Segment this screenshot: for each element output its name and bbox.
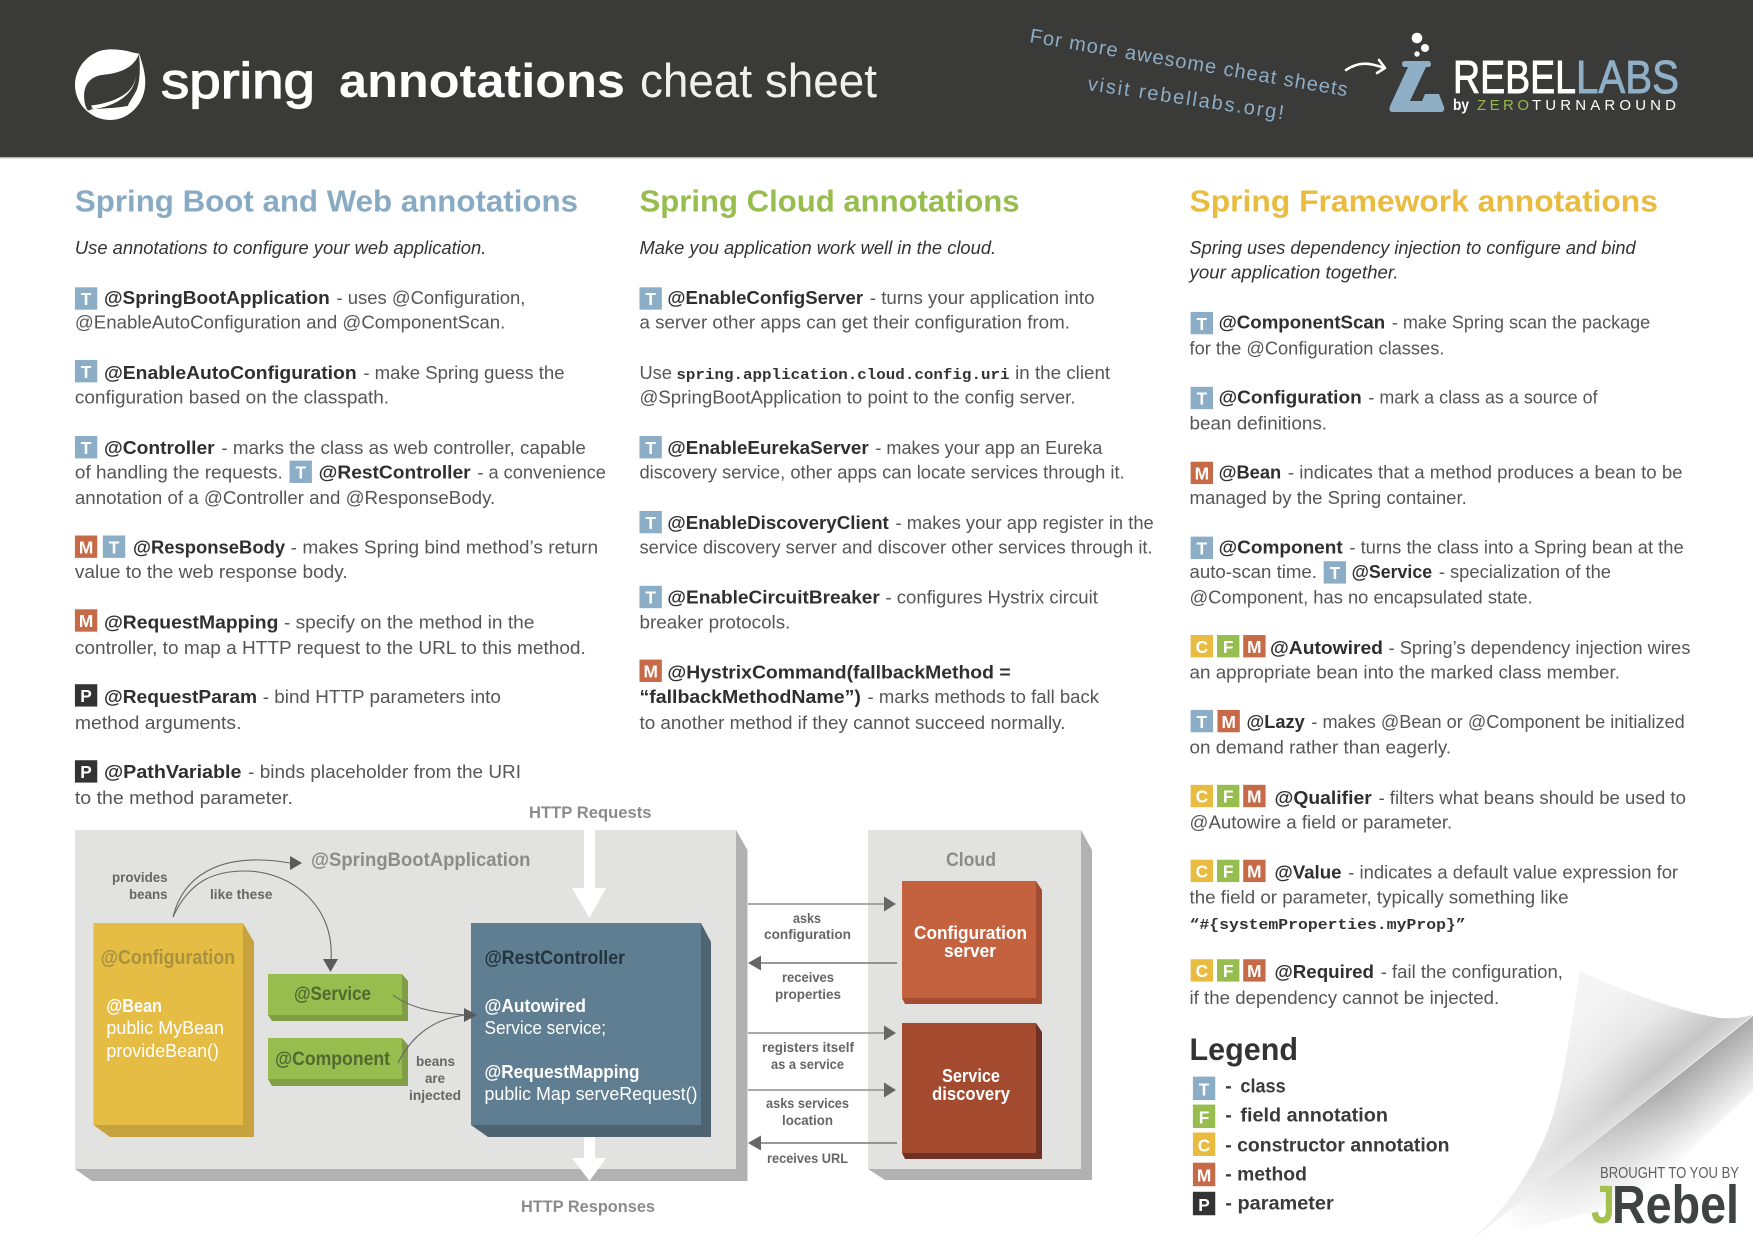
logo: jrebel: [1591, 1165, 1739, 1235]
entry: Controller and RestController: of handling the requests.: [75, 461, 283, 482]
panel: application box: [75, 830, 748, 1181]
icon: arrow to logo: [1346, 60, 1385, 73]
entry: Controller and RestController: @Controller: [104, 437, 215, 458]
intro: boot: Use annotations to configure your web application.: [75, 237, 486, 258]
panel: cloud box: [868, 830, 1092, 1180]
entry: RequestParam: [75, 684, 501, 733]
entry: Value: F: [1223, 862, 1234, 882]
entry: Component and Service: @Component, has no encapsulated state.: [1190, 587, 1533, 608]
heading: spring boot and web: Spring Boot and Web annotations: [75, 185, 578, 218]
entry: EnableConfigServer: @EnableConfigServer: [667, 287, 863, 308]
legend: method: [1193, 1163, 1307, 1186]
logo: rebellabs wordmark: LABS: [1576, 51, 1679, 103]
header band: [0, 0, 1753, 158]
entry: EnableCircuitBreaker: - configures Hystrix circuit: [885, 587, 1099, 608]
entry: RequestMapping: - specify on the method in the: [284, 611, 534, 632]
entry: Required: [1190, 959, 1563, 1008]
label: http responses: HTTP Responses: [521, 1197, 655, 1216]
entry: Autowired: M: [1247, 637, 1262, 657]
arrow: beans injected: [393, 995, 477, 1063]
entry: Configuration: T: [1197, 389, 1208, 409]
entry: ComponentScan: [1190, 312, 1650, 358]
entry: Component and Service: T: [1197, 539, 1208, 559]
entry: HystrixCommand: [639, 660, 1100, 733]
page curl: [1475, 971, 1753, 1240]
entry: PathVariable: [75, 760, 521, 808]
entry: Required: if the dependency cannot be injected.: [1190, 987, 1499, 1008]
entry: RequestMapping: M: [79, 611, 93, 631]
block: configuration server: [902, 881, 1042, 1004]
entry: EnableEurekaServer: T: [645, 438, 656, 458]
legend heading: Legend: [1190, 1032, 1298, 1067]
entry: Controller and RestController: @RestController: [319, 461, 471, 482]
entry: SpringBootApplication: @SpringBootApplication: [104, 287, 330, 308]
entry: Lazy: on demand rather than eagerly.: [1190, 737, 1451, 758]
text block: config uri note: [639, 362, 1111, 408]
entry: Qualifier: F: [1223, 787, 1234, 807]
entry: Required: M: [1247, 961, 1262, 981]
legend: method: M: [1197, 1166, 1211, 1186]
block: restcontroller: public Map serveRequest(): [484, 1084, 698, 1104]
entry: Qualifier: [1190, 785, 1686, 832]
entry: RequestParam: P: [80, 686, 92, 706]
entry: PathVariable: @PathVariable: [104, 761, 241, 782]
handwritten note: For more awesome cheat sheets: [1028, 25, 1349, 101]
entry: Component and Service: T: [1330, 563, 1341, 583]
handwritten note: visit rebellabs.org!: [1086, 73, 1285, 124]
entry: Bean: @Bean: [1219, 461, 1281, 482]
entry: Bean: [1190, 461, 1683, 508]
panel: spring framework annotations: [1188, 185, 1690, 1008]
arrow: like these: [173, 871, 338, 972]
entry: EnableEurekaServer: discovery service, other apps can locate services through it.: [639, 461, 1125, 482]
entry: Bean: - indicates that a method produces a bean to be: [1288, 461, 1683, 482]
entry: EnableConfigServer: [639, 287, 1095, 333]
entry: ResponseBody: - makes Spring bind method’s return: [291, 536, 598, 557]
entry: EnableAutoConfiguration: [75, 360, 565, 408]
entry: ResponseBody: [75, 536, 598, 582]
entry: RequestMapping: [75, 609, 586, 658]
intro: framework: Spring uses dependency injection to configure and bind: [1190, 237, 1636, 258]
arrow: asks services location: [748, 1082, 896, 1098]
block: configuration server: server: [944, 941, 996, 961]
entry: Autowired: F: [1223, 637, 1234, 657]
logo: rebellabs wordmark: by: [1453, 97, 1469, 114]
label: registers itself: [762, 1039, 854, 1072]
label: asks services location: asks services: [766, 1095, 849, 1111]
legend: field annotation: [1193, 1104, 1388, 1128]
entry: Bean: M: [1195, 464, 1209, 484]
label: like these: like these: [210, 886, 273, 902]
label: http requests: HTTP Requests: [529, 803, 652, 822]
entry: EnableEurekaServer: - makes your app an Eureka: [875, 437, 1103, 458]
entry: Controller and RestController: - marks the class as web controller, capable: [221, 437, 586, 458]
label: receives url: receives URL: [767, 1150, 848, 1166]
label: beans are injected: beans: [416, 1053, 455, 1069]
block: restcontroller: @RestController: [484, 948, 626, 969]
legend: class: [1193, 1075, 1286, 1100]
text block: config uri note: @SpringBootApplication to point to the config server.: [639, 387, 1075, 408]
entry: Qualifier: @Autowire a field or parameter.: [1190, 811, 1452, 832]
entry: Controller and RestController: annotation of a @Controller and @ResponseBody.: [75, 487, 495, 508]
logo: rebellabs wordmark: TURNAROUND: [1532, 97, 1676, 114]
entry: Required: - fail the configuration,: [1381, 961, 1563, 982]
entry: EnableCircuitBreaker: [639, 586, 1099, 632]
entry: Configuration: bean definitions.: [1190, 412, 1327, 433]
arrow: http response: [572, 1137, 606, 1181]
entry: Configuration: [1190, 387, 1598, 433]
entry: Controller and RestController: [75, 436, 606, 508]
entry: ResponseBody: @ResponseBody: [133, 536, 286, 557]
icon: rebellabs flask: [1389, 33, 1444, 112]
arrow: provides beans: [173, 856, 302, 917]
block: restcontroller: @RequestMapping: [484, 1062, 640, 1082]
entry: RequestMapping: @RequestMapping: [104, 611, 278, 632]
entry: Component and Service: auto-scan time.: [1190, 561, 1317, 582]
entry: ComponentScan: @ComponentScan: [1219, 312, 1385, 333]
block: configuration: @Configuration: [101, 947, 235, 969]
label: provides beans: [112, 869, 168, 902]
logo: rebellabs wordmark: REBEL: [1453, 51, 1576, 103]
entry: Component and Service: @Component: [1219, 536, 1343, 557]
panel: spring boot and web annotations: [75, 185, 606, 808]
logo: rebellabs wordmark: [1453, 51, 1679, 114]
intro: framework: your application together.: [1188, 261, 1399, 282]
block: configuration: provideBean(): [106, 1041, 219, 1061]
block: configuration: public MyBean: [106, 1018, 224, 1038]
entry: RequestParam: method arguments.: [75, 712, 241, 733]
arrow: registers itself: [748, 1026, 896, 1040]
entry: SpringBootApplication: @EnableAutoConfiguration and @ComponentScan.: [75, 312, 505, 333]
label: receives properties: receives: [782, 969, 834, 985]
legend: field annotation: field annotation: [1240, 1104, 1388, 1126]
entry: Component and Service: - turns the class into a Spring bean at the: [1349, 536, 1684, 557]
entry: EnableAutoConfiguration: T: [81, 362, 92, 382]
label: provides beans: beans: [129, 886, 168, 902]
entry: Controller and RestController: T: [295, 462, 306, 482]
entry: Required: @Required: [1274, 961, 1374, 982]
entry: EnableEurekaServer: @EnableEurekaServer: [667, 437, 869, 458]
entry: HystrixCommand: to another method if they cannot succeed normally.: [639, 712, 1065, 733]
label: beans are injected: are: [425, 1070, 445, 1086]
entry: Controller and RestController: T: [81, 438, 92, 458]
heading: spring framework: Spring Framework annotations: [1190, 185, 1658, 218]
entry: HystrixCommand: @HystrixCommand(fallbackMethod =: [667, 662, 1011, 683]
text block: config uri note: spring.application.cloud.config.uri: [676, 366, 1010, 384]
entry: Component and Service: @Service: [1352, 561, 1432, 582]
entry: Lazy: T: [1197, 712, 1208, 732]
legend: class: T: [1199, 1080, 1210, 1100]
title: spring: [161, 53, 315, 109]
entry: ComponentScan: for the @Configuration classes.: [1190, 337, 1444, 358]
block: service: [268, 974, 408, 1021]
entry: Value: @Value: [1274, 862, 1342, 883]
label: asks configuration: asks: [793, 910, 821, 926]
arrow: receives url: [748, 1136, 897, 1150]
block: component: @Component: [275, 1049, 391, 1070]
block: service: @Service: [294, 984, 371, 1005]
entry: Required: F: [1223, 961, 1234, 981]
label: receives properties: properties: [775, 986, 841, 1002]
arrow: receives properties: [748, 956, 897, 970]
logo: jrebel: J: [1591, 1175, 1615, 1235]
entry: Autowired: [1190, 635, 1690, 683]
legend: method: - method: [1225, 1164, 1307, 1186]
heading: spring cloud: Spring Cloud annotations: [639, 185, 1020, 218]
entry: ComponentScan: T: [1197, 314, 1208, 334]
label: asks configuration: configuration: [764, 926, 851, 942]
legend: class: class: [1240, 1075, 1286, 1097]
entry: Autowired: C: [1196, 637, 1209, 657]
text block: config uri note: Use: [639, 362, 672, 383]
panel: cloud box: Cloud: [946, 850, 996, 871]
entry: EnableCircuitBreaker: breaker protocols.: [639, 611, 790, 632]
entry: Required: C: [1196, 961, 1209, 981]
entry: EnableCircuitBreaker: @EnableCircuitBreaker: [667, 587, 880, 608]
entry: Qualifier: - filters what beans should be used to: [1378, 787, 1686, 808]
entry: Qualifier: C: [1196, 787, 1209, 807]
legend: field annotation: -: [1225, 1104, 1232, 1126]
icon: spring leaf logo: [75, 49, 145, 120]
intro: framework: [1188, 237, 1636, 282]
entry: Component and Service: - specialization of the: [1439, 561, 1611, 582]
entry: PathVariable: - binds placeholder from the URI: [248, 761, 521, 782]
legend: field annotation: F: [1199, 1108, 1209, 1128]
entry: Lazy: [1190, 710, 1685, 758]
entry: Configuration: - mark a class as a source of: [1368, 387, 1598, 408]
entry: Value: [1190, 860, 1678, 934]
label: asks configuration: [764, 910, 851, 942]
entry: PathVariable: to the method parameter.: [75, 787, 293, 808]
entry: EnableAutoConfiguration: @EnableAutoConfiguration: [104, 362, 357, 383]
entry: Lazy: - makes @Bean or @Component be initialized: [1311, 711, 1685, 732]
entry: Value: C: [1196, 862, 1209, 882]
title: cheat sheet: [640, 54, 877, 107]
entry: EnableConfigServer: T: [645, 289, 656, 309]
entry: HystrixCommand: “fallbackMethodName”): [639, 686, 861, 707]
diagram: application architecture: [75, 803, 1092, 1216]
block: configuration: [94, 923, 254, 1137]
label: receives properties: [775, 969, 841, 1002]
entry: RequestParam: @RequestParam: [104, 686, 257, 707]
entry: Autowired: - Spring’s dependency injection wires: [1389, 637, 1690, 658]
entry: Configuration: @Configuration: [1219, 387, 1362, 408]
entry: EnableAutoConfiguration: configuration based on the classpath.: [75, 387, 389, 408]
entry: SpringBootApplication: T: [81, 289, 92, 309]
panel: spring cloud annotations: [639, 185, 1154, 733]
entry: Value: “#{systemProperties.myProp}”: [1190, 916, 1466, 934]
title: annotations: [339, 54, 625, 107]
label: beans are injected: [409, 1053, 461, 1103]
label: beans are injected: injected: [409, 1087, 461, 1103]
entry: SpringBootApplication: - uses @Configuration,: [337, 287, 525, 308]
entry: EnableDiscoveryClient: [639, 511, 1154, 557]
entry: EnableDiscoveryClient: T: [645, 513, 656, 533]
entry: Value: - indicates a default value expression for: [1348, 862, 1678, 883]
label: asks services location: location: [782, 1112, 833, 1128]
entry: EnableEurekaServer: [639, 436, 1125, 482]
label: asks services location: [766, 1095, 849, 1128]
entry: EnableDiscoveryClient: service discovery server and discover other services through it.: [639, 536, 1153, 557]
entry: ComponentScan: - make Spring scan the package: [1392, 312, 1650, 333]
label: springbootapplication: @SpringBootApplication: [311, 850, 530, 871]
entry: Value: the field or parameter, typically something like: [1190, 886, 1569, 907]
block: component: [268, 1038, 408, 1086]
entry: ResponseBody: value to the web response body.: [75, 561, 348, 582]
arrow: http request: [572, 830, 606, 918]
legend: constructor annotation: C: [1198, 1136, 1211, 1156]
legend: parameter: P: [1198, 1195, 1210, 1215]
entry: EnableCircuitBreaker: T: [645, 588, 656, 608]
entry: EnableDiscoveryClient: @EnableDiscoveryClient: [667, 512, 889, 533]
label: registers itself: as a service: [771, 1056, 844, 1072]
entry: Autowired: an appropriate bean into the marked class member.: [1190, 662, 1620, 683]
entry: HystrixCommand: - marks methods to fall back: [868, 686, 1100, 707]
entry: Controller and RestController: - a convenience: [477, 461, 606, 482]
arrow: asks configuration: [748, 896, 896, 912]
entry: EnableDiscoveryClient: - makes your app register in the: [896, 512, 1154, 533]
block: service discovery: discovery: [932, 1084, 1010, 1104]
entry: Qualifier: M: [1247, 787, 1262, 807]
entry: ResponseBody: M: [79, 537, 93, 557]
entry: EnableConfigServer: a server other apps can get their configuration from.: [639, 312, 1070, 333]
legend: class: -: [1225, 1075, 1232, 1097]
block: restcontroller: [471, 923, 711, 1137]
block: service discovery: Service: [942, 1066, 1000, 1086]
label: provides beans: provides: [112, 869, 168, 885]
entry: RequestMapping: controller, to map a HTTP request to the URL to this method.: [75, 637, 586, 658]
legend: constructor annotation: - constructor annotation: [1225, 1135, 1449, 1157]
entry: Lazy: M: [1221, 712, 1236, 732]
block: restcontroller: Service service;: [484, 1018, 606, 1038]
entry: ResponseBody: T: [109, 537, 120, 557]
legend: parameter: - parameter: [1225, 1193, 1334, 1215]
entry: Bean: managed by the Spring container.: [1190, 487, 1467, 508]
title: [161, 53, 877, 109]
entry: Qualifier: @Qualifier: [1274, 787, 1372, 808]
entry: Component and Service: [1190, 536, 1684, 608]
block: configuration: @Bean: [106, 996, 162, 1016]
entry: RequestParam: - bind HTTP parameters into: [263, 686, 501, 707]
entry: HystrixCommand: M: [643, 661, 658, 681]
entry: SpringBootApplication: [75, 287, 525, 333]
entry: EnableAutoConfiguration: - make Spring guess the: [363, 362, 565, 383]
logo: rebellabs wordmark: ZERO: [1477, 97, 1529, 114]
block: configuration server: Configuration: [914, 923, 1027, 943]
block: restcontroller: @Autowired: [484, 996, 586, 1016]
block: service discovery: [902, 1023, 1042, 1159]
entry: Lazy: @Lazy: [1247, 711, 1305, 732]
entry: EnableConfigServer: - turns your application into: [870, 287, 1095, 308]
intro: cloud: Make you application work well in the cloud.: [639, 237, 996, 258]
entry: Value: M: [1247, 862, 1262, 882]
entry: PathVariable: P: [80, 762, 92, 782]
text block: config uri note: in the client: [1015, 362, 1111, 383]
legend: [1190, 1032, 1449, 1215]
label: registers itself: registers itself: [762, 1039, 854, 1055]
entry: Autowired: @Autowired: [1270, 637, 1383, 658]
